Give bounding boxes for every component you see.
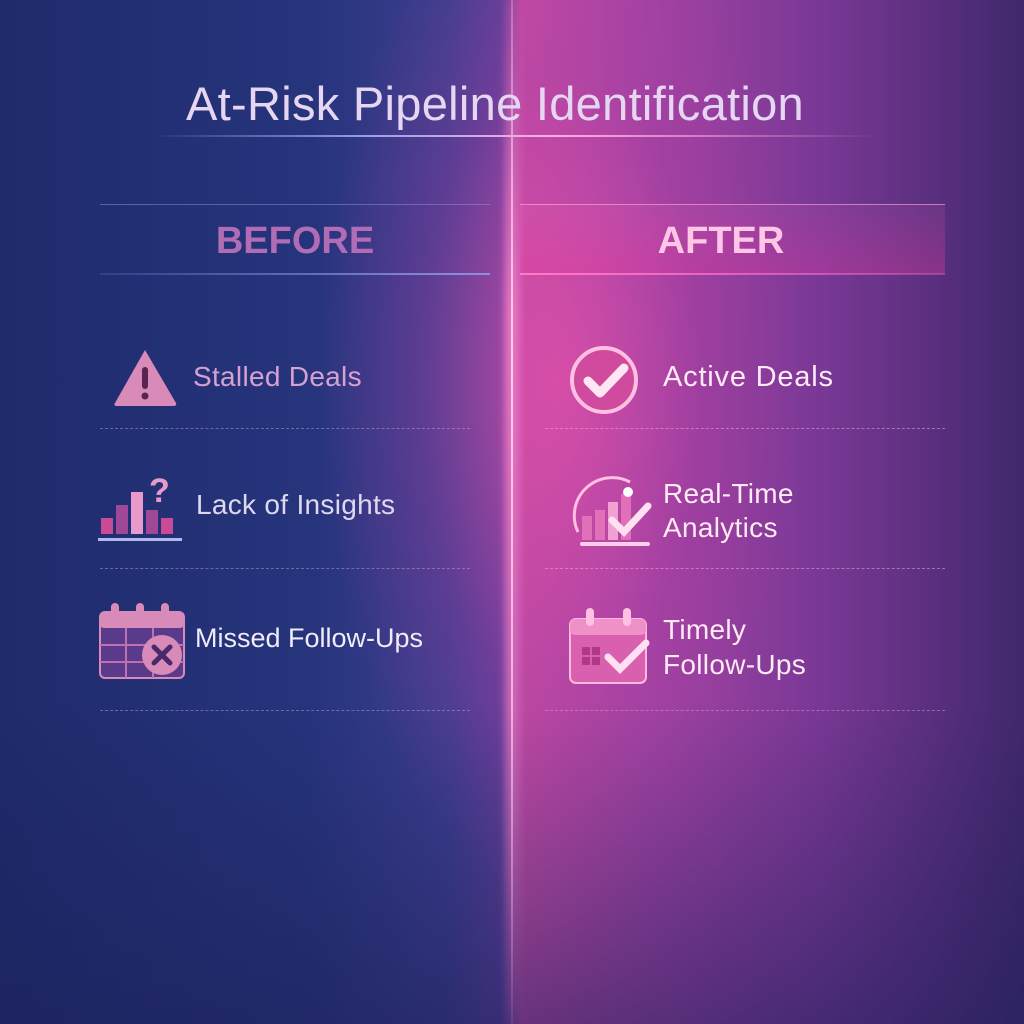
heading: AFTER: AFTER bbox=[658, 220, 784, 262]
item: Timely Follow-Ups bbox=[569, 608, 806, 684]
item: Active Deals bbox=[570, 346, 834, 414]
center glowing divider bbox=[505, 0, 519, 1024]
item: Stalled Deals bbox=[114, 350, 362, 406]
icon: warning bbox=[114, 350, 176, 406]
heading: BEFORE: BEFORE bbox=[216, 220, 374, 262]
item: Lack of Insights: Lack of Insights bbox=[196, 489, 395, 520]
item: Stalled Deals: Stalled Deals bbox=[193, 361, 362, 392]
item: Timely Follow-Ups: Timely bbox=[663, 614, 746, 645]
item: Timely Follow-Ups: Follow-Ups bbox=[663, 649, 806, 680]
heading: AFTER bbox=[520, 204, 945, 274]
item: Real-Time Analytics bbox=[572, 476, 794, 546]
icon: check circle bbox=[570, 346, 638, 414]
item: Missed Follow-Ups: Missed Follow-Ups bbox=[195, 623, 423, 653]
icon: chart with question: ? bbox=[149, 472, 170, 510]
item: Lack of Insights bbox=[98, 472, 395, 541]
icon: calendar check bbox=[569, 608, 650, 684]
icon: chart with question bbox=[98, 472, 182, 541]
icon: calendar with x bbox=[99, 603, 185, 679]
item: Active Deals: Active Deals bbox=[663, 361, 834, 393]
item: Missed Follow-Ups bbox=[99, 603, 423, 679]
title: At-Risk Pipeline Identification bbox=[186, 77, 804, 130]
item: Real-Time Analytics: Analytics bbox=[663, 512, 778, 543]
icon: analytics check bbox=[572, 476, 652, 546]
item: Real-Time Analytics: Real-Time bbox=[663, 478, 794, 509]
